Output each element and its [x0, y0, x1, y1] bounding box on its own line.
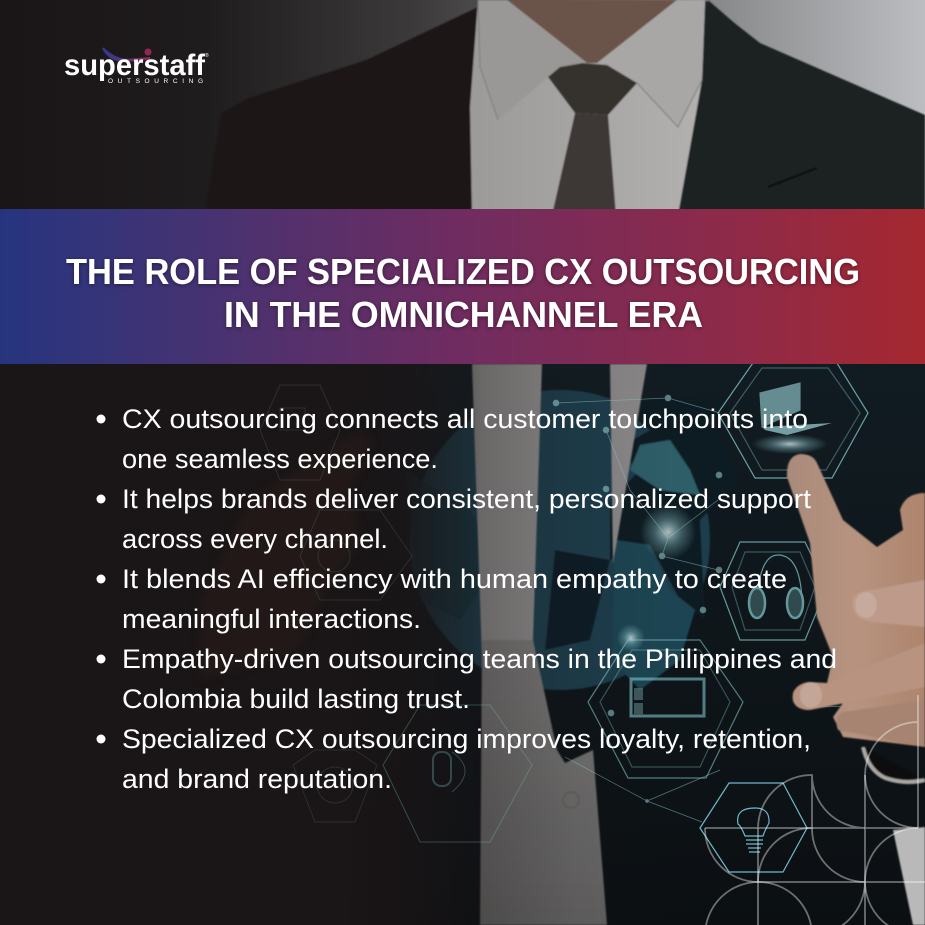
bullet 5: and brand reputation.: [122, 764, 392, 794]
bullet 2: across every channel.: [122, 524, 388, 554]
faint ghost hand on left: [200, 432, 372, 680]
logo dot: [144, 48, 152, 56]
cuff: [863, 747, 925, 782]
bullet 4: [96, 644, 837, 714]
logo registered mark: ®: [205, 52, 209, 59]
dark left fade overlay: [0, 364, 925, 925]
lower node glow: [617, 624, 645, 652]
logo tagline: OUTSOURCING: [108, 78, 203, 85]
bullet 3: meaningful interactions.: [122, 604, 421, 634]
central node glow: [640, 504, 696, 560]
bullet 4: Empathy-driven outsourcing teams in the Philippines and: [122, 644, 837, 674]
globe: [405, 390, 740, 690]
logo: superstaff outsourcing: [64, 48, 209, 85]
bullet 3: [96, 564, 787, 634]
bullet 4: Colombia build lasting trust.: [122, 684, 470, 714]
middle finger: [852, 580, 925, 627]
laptop glow: [752, 434, 828, 454]
bullet 5: [96, 724, 811, 794]
icon: laptop hexagon: [718, 360, 868, 478]
bullet 1: one seamless experience.: [122, 444, 438, 474]
decorative geometric line pattern: [705, 695, 925, 925]
logo wordmark: superstaff: [64, 49, 206, 82]
icon: tablet hexagon: [588, 640, 743, 778]
icon: smartwatch hexagon: [383, 705, 532, 842]
bullet 5: Specialized CX outsourcing improves loyalty, retention,: [122, 724, 811, 754]
upper photo: jacket, shirt, neck and tie: [204, 0, 925, 215]
bullet 2: [96, 484, 812, 554]
title: IN THE OMNICHANNEL ERA: [224, 294, 703, 335]
network lines and glowing nodes: [553, 395, 882, 822]
bullet 1: CX outsourcing connects all customer touchpoints into: [122, 404, 808, 434]
faint left hexagon icon: [260, 385, 412, 600]
bullet 3: It blends AI efficiency with human empathy to create: [122, 564, 787, 594]
lower finger shadow: [836, 700, 925, 747]
bullet 2: It helps brands deliver consistent, personalized support: [122, 484, 812, 514]
hand: [787, 454, 925, 782]
bullet 1: [96, 404, 808, 474]
icon: light bulb hexagon: [700, 783, 807, 872]
lower photo: dark suit and globe: [0, 360, 925, 925]
title band: [0, 209, 925, 364]
middle fingernail: [855, 592, 877, 618]
fingernail: [800, 682, 822, 708]
shirt button: [563, 792, 579, 808]
shirt below the band: [472, 364, 925, 925]
icon: headphones hexagon: [720, 542, 827, 640]
title: THE ROLE OF SPECIALIZED CX OUTSOURCING: [66, 251, 860, 292]
ring finger: [793, 643, 925, 710]
icon: globe hexagon: [293, 750, 377, 822]
bullet list: [96, 404, 837, 794]
logo swoosh: [103, 48, 150, 60]
title: [66, 251, 860, 335]
